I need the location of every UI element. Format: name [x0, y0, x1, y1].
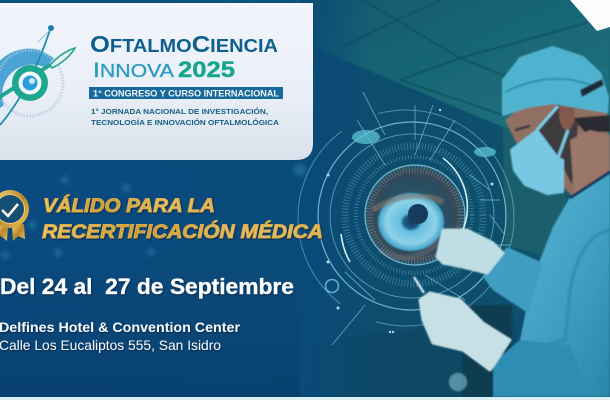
- hologram rings: [298, 92, 514, 345]
- bokeh dots on the left: [1, 164, 306, 259]
- bottom strip: [0, 397, 610, 400]
- icon: gold certification badge: [0, 190, 29, 241]
- neck and face: [505, 96, 610, 197]
- conference description: 1° JORNADA NACIONAL DE INVESTIGACIÓN,: [91, 107, 268, 116]
- lower glove: [420, 293, 510, 370]
- lower sleeve: [493, 340, 590, 397]
- ceiling light: [570, 0, 610, 31]
- event dates: Del 24 al 27 de Septiembre: [0, 274, 294, 299]
- surgeon: [414, 47, 610, 397]
- logo: [0, 25, 75, 125]
- upper glove: [437, 230, 503, 273]
- hologram dots: [326, 109, 494, 333]
- event subtitle: INNOVA: [93, 59, 174, 82]
- eye iris: [365, 165, 465, 265]
- operating room ceiling and wall: [315, 0, 610, 397]
- event title: OFTALMO CIENCIA: [90, 31, 278, 57]
- scrub body: [493, 173, 610, 397]
- gold heading: valid for medical recertification: RECERTIFICACIÓN MÉDICA: [42, 221, 323, 243]
- hologram of the eye: [298, 92, 514, 345]
- header panel: [0, 3, 313, 160]
- congress banner: 1° CONGRESO Y CURSO INTERNACIONAL: [93, 89, 279, 99]
- gold heading: valid for medical recertification: [42, 195, 323, 243]
- conference description: [91, 107, 280, 127]
- venue: [0, 319, 241, 353]
- photo fade into the blue background: [300, 0, 370, 397]
- venue: Calle Los Eucaliptos 555, San Isidro: [0, 337, 221, 353]
- conference description: TECNOLOGÍA E INNOVACIÓN OFTALMOLÓGICA: [91, 118, 280, 127]
- hologram highlights: [352, 130, 496, 157]
- upper sleeve: [483, 247, 543, 313]
- venue: Delfines Hotel & Convention Center: [0, 319, 241, 335]
- surgical cap: [503, 47, 608, 115]
- gold heading: valid for medical recertification: VÁLIDO PARA LA: [43, 195, 215, 217]
- event year: 2025: [178, 57, 235, 82]
- instrument: [414, 277, 424, 293]
- surgical mask: [511, 130, 563, 194]
